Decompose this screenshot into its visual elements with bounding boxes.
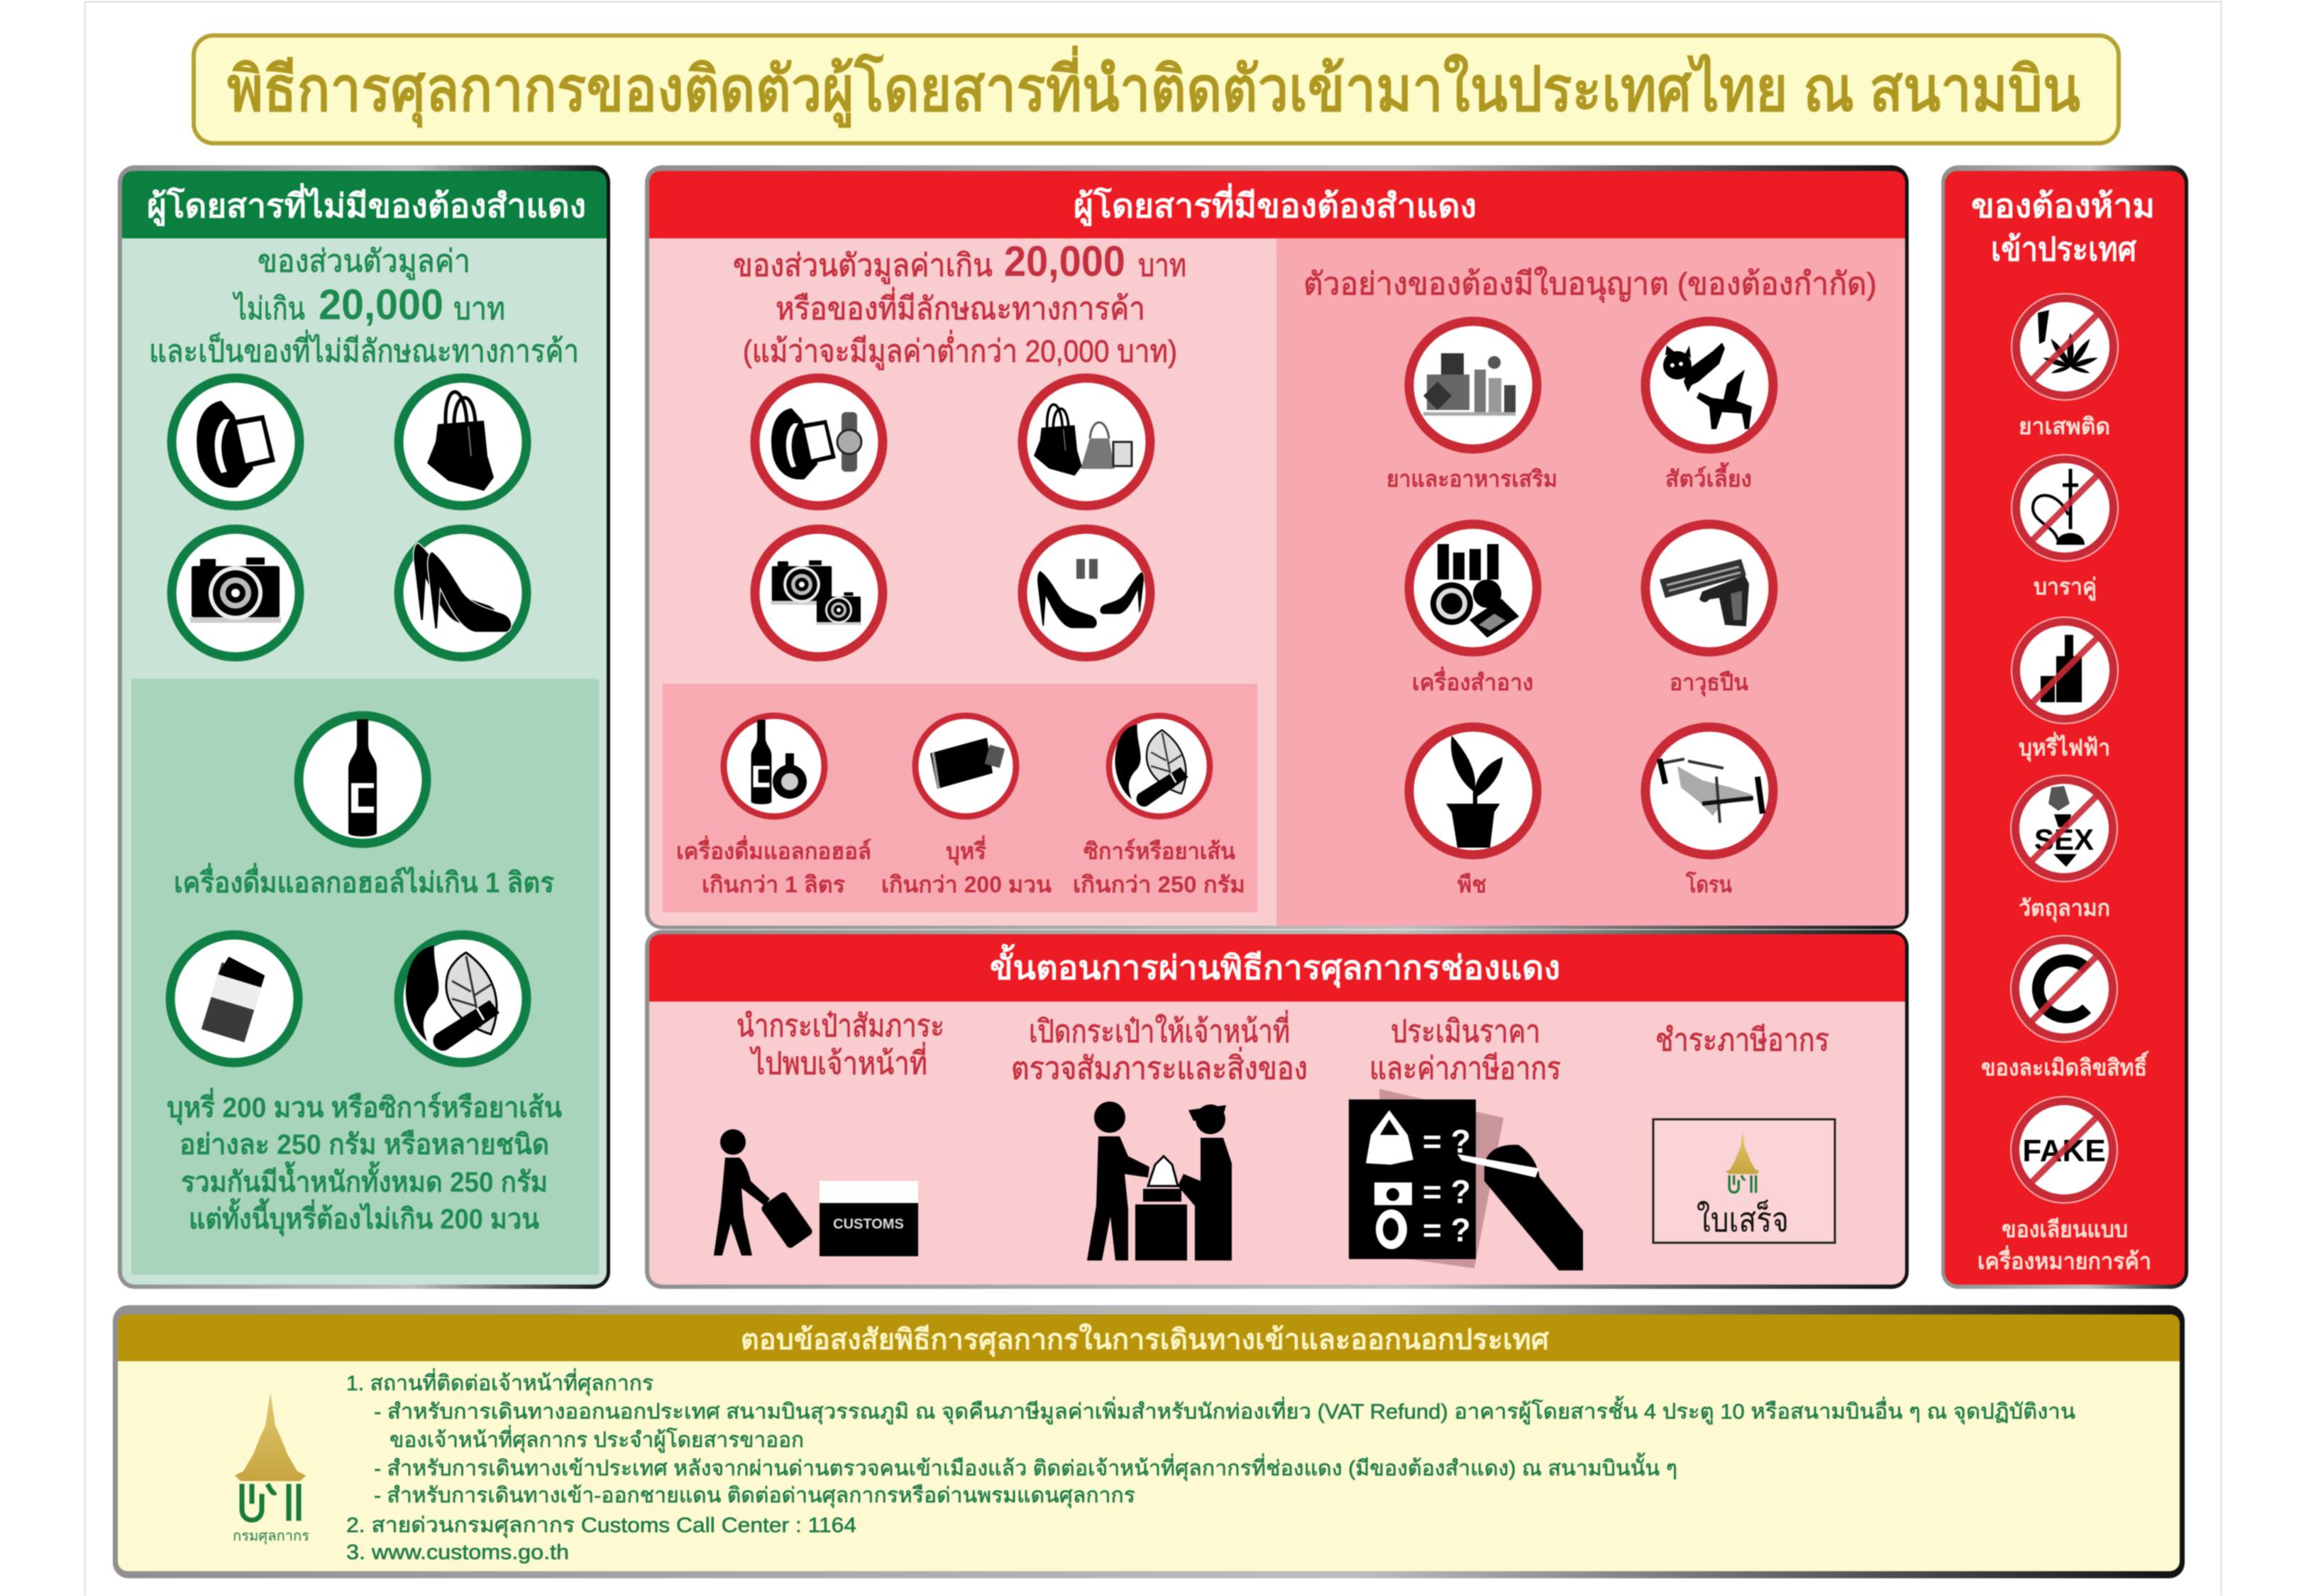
icon: liquor xyxy=(724,716,824,816)
label: pets: สัตว์เลี้ยง xyxy=(1665,462,1752,492)
label: obscene material: วัตถุลามก xyxy=(2019,895,2110,923)
text: personal goods limit: และเป็นของที่ไม่มีลักษณะทางการค้า xyxy=(149,329,579,369)
step 3: assess value and duties: และค่าภาษีอากร xyxy=(1369,1051,1561,1086)
step 2: open baggage for inspection: เปิดกระเป๋าให้เจ้าหน้าที่ xyxy=(1029,1009,1290,1049)
title xyxy=(194,35,2119,143)
label: plants: พืช xyxy=(1457,872,1486,897)
icon: hookah xyxy=(2012,455,2118,561)
icon: liquor bottle xyxy=(299,716,426,843)
sub-panel: alcohol and tobacco over limit xyxy=(663,684,1257,912)
text: cigarettes over limit: เกินกว่า 200 มวน xyxy=(881,872,1052,897)
text: tobacco limit: อย่างละ 250 กรัม หรือหลายชนิด xyxy=(180,1129,549,1160)
heading: red panel: ผู้โดยสารที่มีของต้องสำแดง xyxy=(1074,183,1477,226)
text: personal goods over limit xyxy=(733,238,1186,370)
text: cigarettes over limit: บุหรี่ xyxy=(946,835,986,866)
label: drones: โดรน xyxy=(1685,871,1732,897)
text: alcohol limit: เครื่องดื่มแอลกอฮอล์ไม่เกิน 1 ลิตร xyxy=(174,863,554,899)
icon: handbag xyxy=(399,378,526,506)
text: cigars over limit: เกินกว่า 250 กรัม xyxy=(1073,872,1245,897)
text: contact details: 2. สายด่วนกรมศุลกากร Customs Call Center : 1164 xyxy=(346,1514,856,1539)
step 3: assess value and duties: = ? xyxy=(1423,1123,1471,1160)
step 2: open baggage for inspection xyxy=(1011,1009,1308,1260)
step 3: assess value and duties: = ? xyxy=(1423,1212,1471,1248)
label: narcotics: ยาเสพติด xyxy=(2019,414,2110,439)
icon: shoes xyxy=(1022,529,1150,657)
icon: smart watch xyxy=(172,378,299,506)
icon: cigar and tobacco xyxy=(399,935,526,1063)
text: contact details: ของเจ้าหน้าที่ศุลกากร ประจำผู้โดยสารขาออก xyxy=(390,1425,804,1453)
icon: cigar xyxy=(1109,716,1210,816)
panel: passengers with goods to declare xyxy=(645,165,1909,929)
step 4: pay duty with receipt xyxy=(1653,1023,1835,1243)
title: พิธีการศุลกากรของติดตัวผู้โดยสารที่นำติดตัวเข้ามาในประเทศไทย ณ สนามบิน xyxy=(227,46,2080,127)
step 4: pay duty with receipt: ชำระภาษีอากร xyxy=(1655,1023,1829,1058)
icon: gun xyxy=(1645,524,1773,652)
icon: copyright violation xyxy=(2011,936,2117,1042)
icon: cigarette carton xyxy=(915,716,1016,816)
heading: prohibited goods: เข้าประเทศ xyxy=(1991,231,2137,267)
step 3: assess value and duties: ประเมินราคา xyxy=(1391,1014,1540,1049)
text: personal goods over limit: บาท xyxy=(1138,248,1186,283)
label: counterfeit: ของเลียนแบบ xyxy=(2002,1217,2128,1242)
icon: plant xyxy=(1409,727,1537,855)
text: tobacco limit: บุหรี่ 200 มวน หรือซิการ์หรือยาเส้น xyxy=(167,1087,562,1126)
label: hookah: บาราคู่ xyxy=(2034,574,2097,602)
label: cosmetics: เครื่องสำอาง xyxy=(1412,666,1533,695)
heading: prohibited goods xyxy=(1971,187,2155,267)
icon: counterfeit: FAKE xyxy=(2022,1134,2106,1168)
icon: cosmetics xyxy=(1409,524,1537,652)
icon: drone xyxy=(1645,727,1773,855)
step 3: assess value and duties: = ? xyxy=(1423,1173,1471,1210)
text: contact details: 1. สถานที่ติดต่อเจ้าหน้าที่ศุลกากร xyxy=(346,1368,653,1397)
step 1: bring baggage to officer xyxy=(714,1009,944,1256)
text: personal goods over limit: ของส่วนตัวมูลค่าเกิน xyxy=(733,248,993,284)
label: copyright violation: ของละเมิดลิขสิทธิ์ xyxy=(1981,1051,2150,1080)
label: e-cigarette: บุหรี่ไฟฟ้า xyxy=(2019,731,2110,763)
text: personal goods limit: ของส่วนตัวมูลค่า xyxy=(258,244,470,280)
text: tobacco limit: รวมกันมีน้ำหนักทั้งหมด 250 กรัม xyxy=(181,1161,548,1198)
text: alcohol over limit: เกินกว่า 1 ลิตร xyxy=(702,872,845,897)
step 1: bring baggage to officer: ไปพบเจ้าหน้าที่ xyxy=(749,1041,927,1081)
text: personal goods over limit: หรือของที่มีลักษณะทางการค้า xyxy=(776,287,1145,326)
icon: counterfeit xyxy=(2011,1097,2117,1203)
logo: customs department: กรมศุลกากร xyxy=(233,1529,309,1545)
icon: e-cigarette xyxy=(2012,617,2118,724)
icon: cigarette pack xyxy=(170,935,298,1063)
text: personal goods limit: ไม่เกิน xyxy=(233,291,305,326)
icon: obscene material: SEX xyxy=(2034,823,2094,856)
heading: contact: ตอบข้อสงสัยพิธีการศุลกากรในการเดินทางเข้าและออกนอกประเทศ xyxy=(741,1323,1550,1358)
text: personal goods over limit: 20,000 xyxy=(1004,238,1125,285)
text: contact details: - สำหรับการเดินทางออกนอกประเทศ สนามบินสุวรรณภูมิ ณ จุดคืนภาษีมูลค่าเพิ่มสำหรับนักท่องเที่ยว (VAT Refund) อาคารผู้โดยสารชั้น 4 ประตู 10 หรือสนามบินอื่น ๆ ณ จุดปฏิบัติงาน xyxy=(374,1396,2075,1425)
text: contact details: - สำหรับการเดินทางเข้า-ออกชายแดน ติดต่อด่านศุลกากรหรือด่านพรมแดนศุลกากร xyxy=(374,1484,1135,1509)
heading: green panel: ผู้โดยสารที่ไม่มีของต้องสำแดง xyxy=(147,183,586,226)
icon: watches xyxy=(755,378,883,506)
sub-panel: alcohol and tobacco allowance xyxy=(131,679,599,1275)
step 1: bring baggage to officer: CUSTOMS xyxy=(833,1217,904,1232)
text: cigars over limit: ซิการ์หรือยาเส้น xyxy=(1083,838,1235,864)
text: cigarettes over limit xyxy=(881,835,1052,897)
heading: procedure: ขั้นตอนการผ่านพิธีการศุลกากรช่องแดง xyxy=(990,943,1560,988)
icon: cameras xyxy=(755,529,883,657)
step 4: pay duty with receipt: ใบเสร็จ xyxy=(1697,1199,1789,1239)
label: counterfeit: เครื่องหมายการค้า xyxy=(1977,1245,2151,1274)
text: personal goods limit xyxy=(149,244,579,369)
text: tobacco limit xyxy=(167,1087,562,1237)
text: contact details xyxy=(346,1368,2075,1564)
panel: prohibited goods xyxy=(1941,165,2188,1289)
text: contact details: - สำหรับการเดินทางเข้าประเทศ หลังจากผ่านด่านตรวจคนเข้าเมืองแล้ว ติดต่อเจ้าหน้าที่ศุลกากรที่ช่องแดง (มีของต้องสำแดง) ณ สนามบินนั้น ๆ xyxy=(374,1453,1677,1482)
text: personal goods limit: 20,000 xyxy=(319,281,443,328)
text: contact details: 3. www.customs.go.th xyxy=(346,1541,569,1564)
panel: passengers with nothing to declare xyxy=(118,165,610,1289)
icon: pets xyxy=(1645,321,1773,449)
logo: customs department xyxy=(233,1392,309,1545)
text: cigars over limit xyxy=(1073,838,1245,897)
icon: handbags xyxy=(1022,378,1150,506)
step 2: open baggage for inspection: ตรวจสัมภาระและสิ่งของ xyxy=(1011,1046,1308,1086)
text: personal goods limit: บาท xyxy=(453,292,505,326)
icon: camera xyxy=(172,529,299,657)
heading: prohibited goods: ของต้องห้าม xyxy=(1971,187,2155,224)
step 1: bring baggage to officer: นำกระเป๋าสัมภาระ xyxy=(737,1009,944,1043)
text: tobacco limit: แต่ทั้งนี้บุหรี่ต้องไม่เกิน 200 มวน xyxy=(189,1198,539,1237)
text: alcohol over limit xyxy=(676,835,871,897)
panel: red channel procedure xyxy=(645,930,1909,1289)
label: medicine: ยาและอาหารเสริม xyxy=(1386,466,1557,492)
step 3: assess value and duties xyxy=(1349,1014,1583,1270)
icon: medicine xyxy=(1409,321,1537,449)
icon: obscene material xyxy=(2011,775,2117,882)
text: alcohol over limit: เครื่องดื่มแอลกอฮอล์ xyxy=(676,835,871,864)
icon: narcotics xyxy=(2012,294,2118,400)
text: personal goods over limit: (แม้ว่าจะมีมูลค่าต่ำกว่า 20,000 บาท) xyxy=(743,329,1177,370)
panel: contact information xyxy=(113,1305,2185,1578)
heading: restricted goods: ตัวอย่างของต้องมีใบอนุญาต (ของต้องกำกัด) xyxy=(1303,266,1877,303)
label: counterfeit xyxy=(1977,1217,2151,1274)
label: firearms: อาวุธปืน xyxy=(1670,670,1748,697)
icon: high heels xyxy=(399,529,526,657)
